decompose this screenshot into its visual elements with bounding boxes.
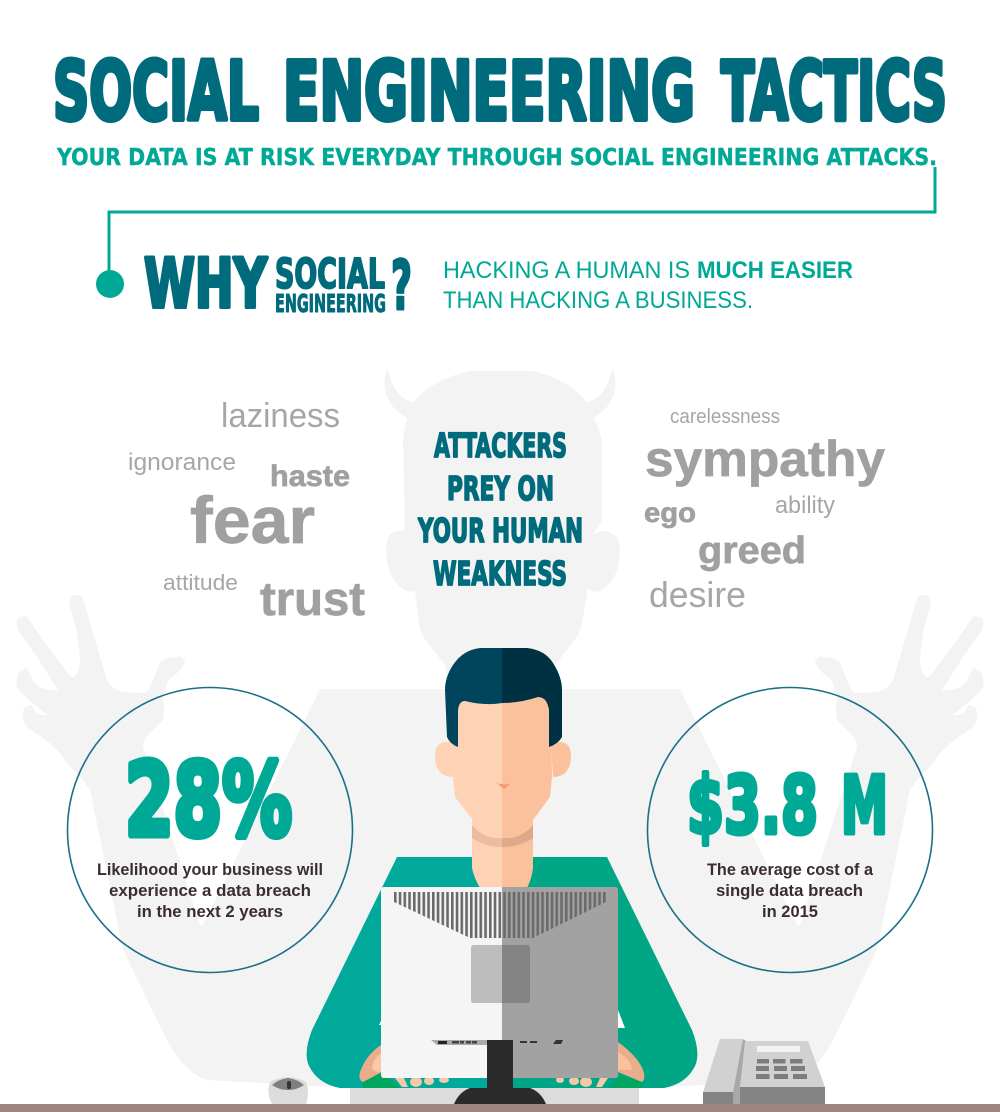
monitor stand — [454, 1040, 546, 1104]
heading: why social engineering: ? — [391, 247, 412, 326]
word cloud right: carelessness — [670, 406, 780, 428]
title — [53, 46, 947, 140]
icon: mouse — [268, 1077, 308, 1104]
text: hacking a human — [443, 257, 853, 314]
monitor back — [381, 887, 618, 1078]
stat circle: $3.8 M: M — [841, 760, 888, 852]
word cloud right: desire — [649, 574, 746, 615]
stat circle: 28%: experience a data breach — [109, 881, 311, 900]
icon: telephone — [703, 1039, 825, 1104]
stat circle: $3.8 M: $3.8 — [687, 760, 818, 852]
devil body left with hand — [16, 595, 500, 1087]
word cloud right: ego — [644, 497, 696, 528]
devil body right with hand — [500, 595, 984, 1087]
word cloud left: trust — [260, 572, 365, 625]
word cloud left — [128, 397, 365, 625]
center message: PREY ON — [447, 469, 554, 508]
word cloud left: haste — [270, 460, 350, 493]
center message: WEAKNESS — [433, 554, 567, 593]
desk top strip — [350, 1088, 639, 1104]
heading: why social engineering: SOCIAL — [275, 250, 385, 298]
word cloud right: greed — [698, 530, 806, 572]
center panel — [471, 945, 530, 1003]
ears — [435, 742, 571, 777]
desk — [0, 1104, 1000, 1112]
word cloud left: fear — [190, 483, 315, 557]
stat circle: 28%: 28% — [125, 741, 292, 859]
center message — [417, 426, 583, 593]
hands — [359, 1042, 644, 1088]
word cloud left: ignorance — [128, 449, 236, 476]
shirt — [307, 857, 697, 1088]
stat circle: $3.8 M: The average cost of a — [707, 860, 874, 879]
hair — [445, 648, 562, 747]
stat circle: 28%: in the next 2 years — [137, 902, 283, 921]
heading: why social engineering — [144, 245, 412, 326]
fingers — [395, 1077, 608, 1087]
title: SOCIAL — [53, 46, 259, 140]
neck — [472, 815, 533, 888]
heading: why social engineering: ENGINEERING — [275, 289, 386, 318]
stat circle: 28% — [68, 688, 352, 972]
computer monitor — [381, 887, 618, 1104]
person — [307, 648, 697, 1088]
stat circle: $3.8 M: single data breach — [716, 881, 863, 900]
text: hacking a human: THAN HACKING A BUSINESS. — [443, 287, 753, 314]
devil head with horns — [384, 368, 620, 690]
word cloud right — [644, 406, 885, 615]
title: ENGINEERING — [283, 46, 695, 140]
center message: YOUR HUMAN — [417, 511, 583, 550]
word cloud left: attitude — [163, 570, 238, 595]
stat circle: 28%: Likelihood your business will — [97, 860, 323, 879]
port slot — [431, 1040, 563, 1045]
word cloud right: ability — [775, 492, 835, 519]
vent stripes — [394, 892, 606, 938]
connector line with dot — [96, 167, 935, 298]
word cloud right: sympathy — [645, 431, 885, 487]
background devil silhouette — [16, 368, 984, 1087]
text: hacking a human: MUCH EASIER — [697, 257, 853, 284]
word cloud left: laziness — [221, 397, 340, 435]
face — [453, 695, 552, 838]
stat circle: $3.8 M — [648, 688, 932, 972]
heading: why social engineering: WHY — [144, 245, 268, 324]
text: hacking a human: HACKING A HUMAN IS — [443, 257, 690, 284]
stat circle: $3.8 M: in 2015 — [762, 902, 818, 921]
center message: ATTACKERS — [434, 426, 567, 465]
